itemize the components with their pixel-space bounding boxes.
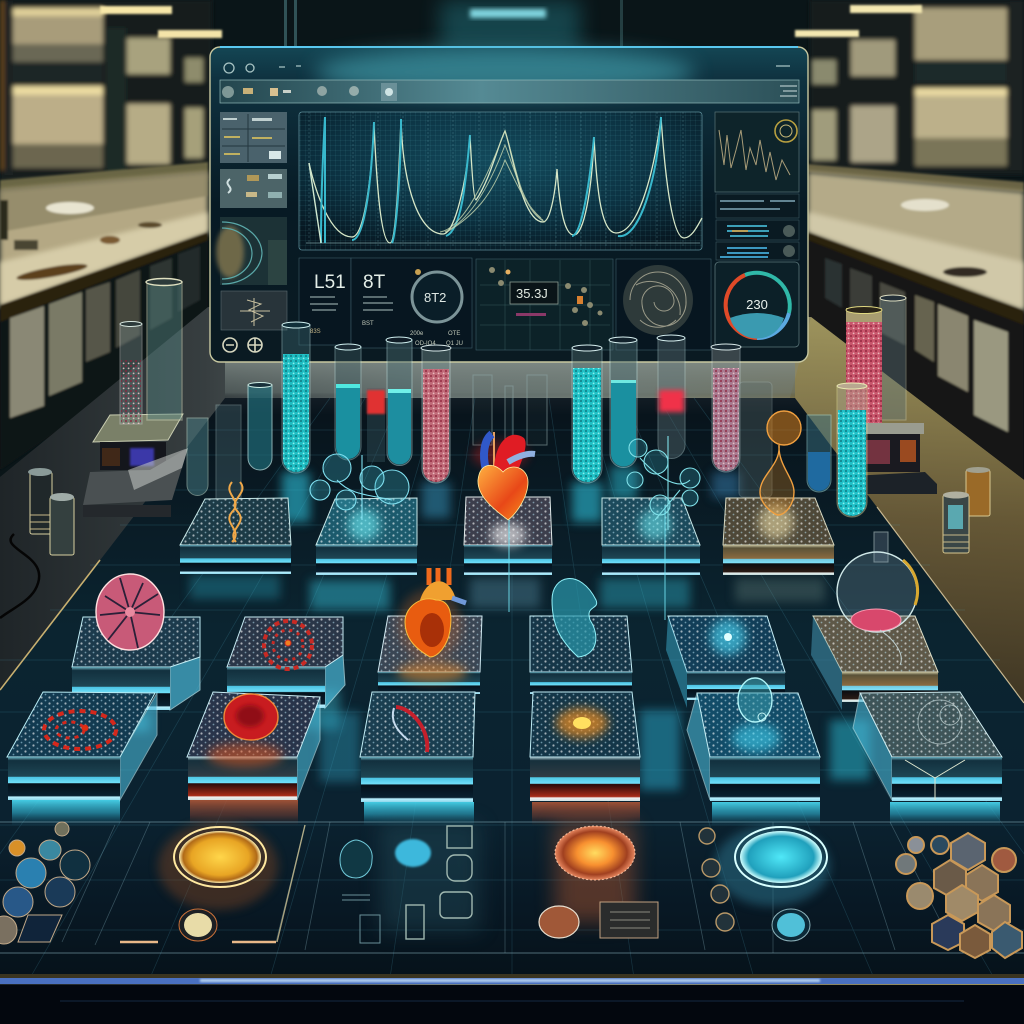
chip back row five [723,498,834,575]
chip front row d [530,692,640,826]
colored gauge panel 230: 230 [746,297,768,312]
bottom icons [223,338,262,352]
chart peak bundle [440,131,545,232]
panel: hexagon cluster right [896,833,1022,958]
readout panel: 8T gauge: 8T [363,272,386,293]
orange hologram bulb [760,411,801,515]
readout panel: 8T gauge: 200e [410,331,424,337]
microscope device left [83,414,188,517]
lung hologram left [310,454,409,520]
chip back row one [180,498,291,574]
main spectrum chart [299,112,702,250]
pink muscle disc organ [96,574,164,650]
left info panel two [220,169,287,208]
chip mid row: A [72,617,200,710]
tube red seven [657,335,685,458]
readout panel: L51 [299,258,351,345]
red cell ring on chip a [44,711,116,749]
heart upper [472,432,535,520]
readout panel: 8T gauge: BST [362,321,374,327]
panel: cyan disc [699,826,830,941]
red ball organ [224,694,278,740]
readout panel: L51: 83S [310,329,321,335]
heart middle [398,568,466,661]
surface gold edge lines [0,507,1024,703]
chip mid row: B [227,617,345,708]
right microscope device [837,295,937,494]
tube teal two [335,344,361,460]
chip front row e [687,693,820,826]
orange helix hologram [229,482,243,542]
test tubes back row left [282,322,451,483]
tube cyan five [572,345,602,483]
circuit readout panel: 35.3J [516,286,548,301]
right data panels with bars [716,194,799,260]
blue egg hologram [738,678,772,722]
panel: yellow disc [120,822,278,942]
chip mid row: C [378,616,482,694]
readout panel: 8T gauge: OD-IO4 [415,341,436,347]
panel: orange disc [539,822,658,938]
tube mauve eight [711,344,741,472]
glass flask with pink disc [837,532,918,665]
panel: teal schematics [340,822,480,943]
monitor dashboard [210,47,808,362]
chart curve: white-gold series [309,117,702,243]
left laboratory shelves [0,0,212,180]
chip back row three [464,497,552,575]
table warm reflection right [790,317,1024,720]
readout panel: 8T gauge: OTE [448,331,460,337]
left lab counter and cabinets [0,162,208,470]
readout panel: 8T gauge: Q1 JU [446,341,463,347]
monitor toolbar [220,80,799,103]
chip front row f [853,692,1002,826]
chip back row two [316,498,417,575]
tube teal six [609,337,637,468]
table band below monitor [225,350,795,400]
orange core on chip d [556,708,608,738]
readout panel: L51: L51 [314,272,346,293]
chart curve: cyan series [321,117,661,243]
ceiling lights [100,0,922,50]
chip front row b [187,692,320,826]
circuit readout panel [476,259,613,350]
right tubes and glass [739,382,867,517]
tubes left of first chip [187,382,272,500]
readout panel: 8T gauge [351,258,472,348]
chip front row c [360,692,475,826]
tube teal three [386,337,412,465]
chip mid row: F [811,616,938,710]
panel: badge cluster left [0,822,90,944]
chip mid row: D [530,616,632,694]
left schematic panel [221,291,287,330]
dark circuit surface [0,398,1024,978]
circular gauge [412,272,462,322]
chip back row four [602,498,700,575]
right vials [943,467,990,553]
left radial image panel [216,217,287,285]
glass cylinders left [120,278,182,424]
lung hologram right [627,436,700,530]
right lab counter and cabinets [808,164,1024,482]
lab table surface [0,307,1024,1024]
chip mid row: E [666,616,785,708]
perspective grid [0,398,1024,978]
swirling globe panel [616,259,711,350]
tube and chip glow reflections on surface [90,466,870,790]
readout panel: 8T gauge: 8T2 [424,290,446,305]
bottom holographic panels [0,822,1024,958]
right laboratory shelves [810,0,1024,175]
faint center tubes [473,375,547,446]
test tubes back row right [572,335,741,483]
tube cyan one [282,322,310,473]
monitor top glow [315,48,695,96]
tube pink four [421,345,451,483]
red cell ring on chip B [264,621,312,669]
vertical light beams [509,505,665,620]
kidney hologram cyan [552,579,597,657]
right mini chart panel [715,112,799,192]
colored gauge panel 230 [715,262,799,347]
monitor window icons [224,63,790,73]
faint red tube [367,388,385,462]
left info panel one [220,112,287,163]
chip front row a [7,692,157,826]
small vials left [0,468,74,618]
red arc organ [393,707,427,752]
table front edge light bar [0,974,1024,1024]
